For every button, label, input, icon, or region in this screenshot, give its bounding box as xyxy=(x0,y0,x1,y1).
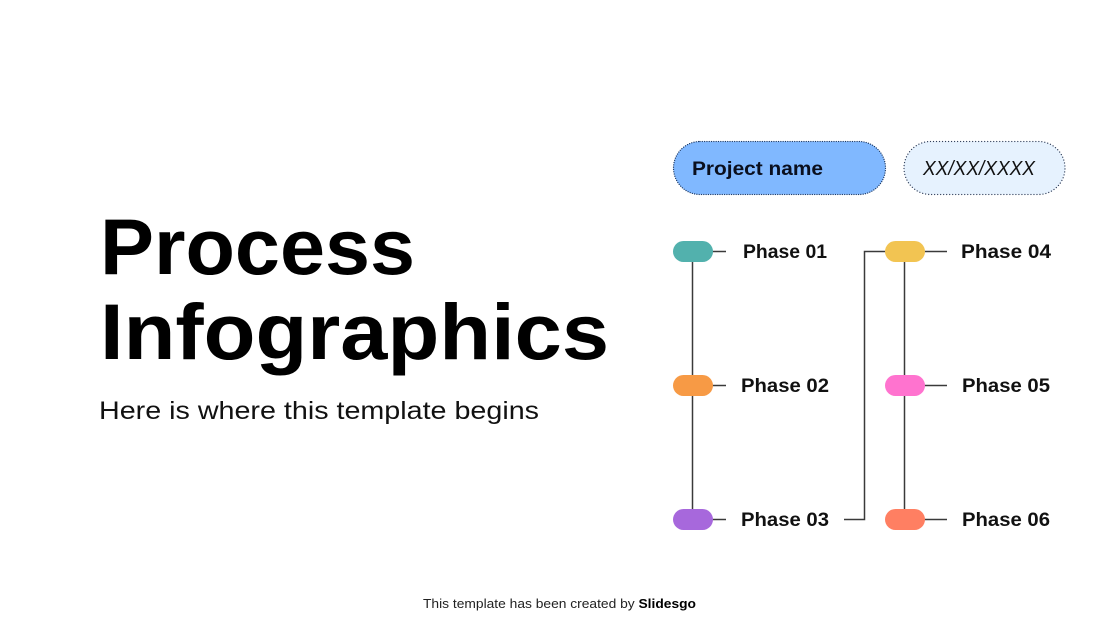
phase 03 xyxy=(673,509,829,531)
phase 06: Phase 06 xyxy=(962,510,1050,531)
title: Infographics xyxy=(100,287,609,376)
date pill xyxy=(904,142,1065,194)
timeline: phases 01 to 03 xyxy=(673,241,829,531)
timeline: phases 04 to 06 xyxy=(885,241,1051,531)
connector line: right column xyxy=(904,251,947,520)
phase 05: Phase 05 xyxy=(962,376,1050,397)
phase 02: Phase 02 xyxy=(741,376,829,397)
phase 06 xyxy=(885,509,1050,531)
project name pill: Project name xyxy=(692,159,823,180)
phase 02 xyxy=(673,375,829,397)
phase 04: Phase 04 xyxy=(961,242,1051,263)
footer credit: This template has been created by Slidesgo xyxy=(423,596,696,611)
phase 04 xyxy=(885,241,1051,263)
date pill: XX/XX/XXXX xyxy=(922,158,1036,180)
phase 01 xyxy=(673,241,827,263)
phase 05 xyxy=(885,375,1050,397)
phase 01: Phase 01 xyxy=(743,242,827,263)
subtitle: Here is where this template begins xyxy=(99,397,539,425)
title xyxy=(100,202,609,376)
connector line: left column xyxy=(692,251,726,520)
title: Process xyxy=(100,202,415,291)
project name pill xyxy=(674,142,886,194)
phase 03: Phase 03 xyxy=(741,510,829,531)
arrow connector: phase 03 to phase 04 xyxy=(844,252,886,520)
